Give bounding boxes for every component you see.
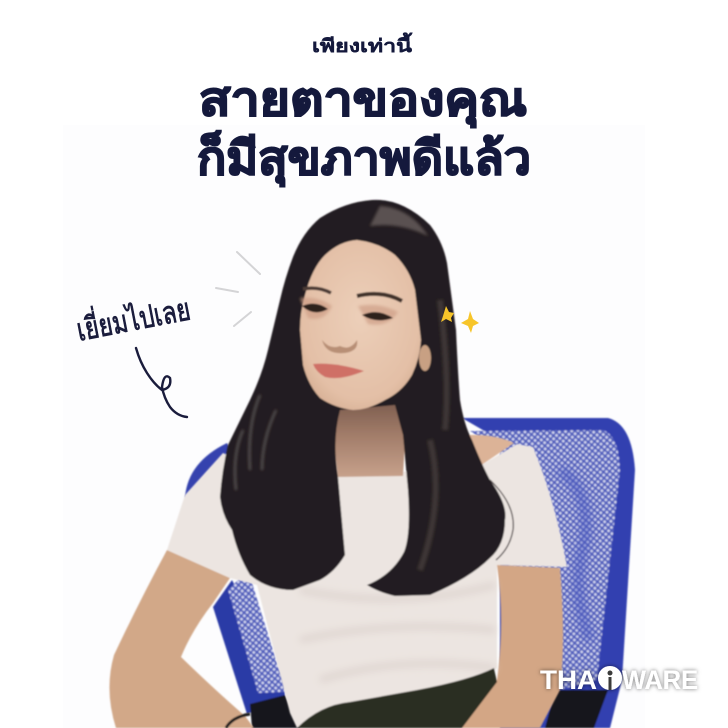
right eyebrow xyxy=(357,294,402,301)
sparkle icons xyxy=(441,306,479,333)
office chair xyxy=(185,418,635,728)
left eye xyxy=(302,304,328,312)
shoulder skin xyxy=(455,435,514,466)
chair back right xyxy=(462,418,635,728)
chair back left lower xyxy=(213,580,285,714)
sparkle large xyxy=(461,311,479,333)
neck xyxy=(328,390,408,477)
photo backdrop xyxy=(63,125,645,728)
logo icon xyxy=(598,666,622,690)
sparkle small xyxy=(441,306,454,322)
heading: intro line: เพียงเท่านี้ xyxy=(312,32,414,56)
heading: main title xyxy=(197,73,531,187)
left eyebrow xyxy=(303,288,331,293)
stray hair strands xyxy=(490,480,513,560)
logo: Thaiware xyxy=(540,665,698,695)
chair back left upper xyxy=(185,443,232,500)
left arm xyxy=(109,550,254,728)
nose xyxy=(322,340,357,353)
right arm xyxy=(462,565,563,728)
ear xyxy=(419,345,431,371)
arrow squiggle xyxy=(136,348,187,417)
wristband xyxy=(226,714,250,728)
white top xyxy=(167,444,567,728)
hair highlight xyxy=(370,206,428,236)
right eye xyxy=(362,312,393,320)
face xyxy=(300,240,421,410)
person xyxy=(109,200,567,728)
top fabric folds xyxy=(300,585,495,680)
mouth xyxy=(313,364,364,378)
logo: Thaiware: WARE xyxy=(622,665,698,695)
handwritten note: เยี่ยมไปเลย xyxy=(73,288,193,348)
heading: main title: สายตาของคุณ xyxy=(199,73,527,128)
accent lines xyxy=(216,252,260,326)
logo: Thaiware: THA xyxy=(540,665,597,695)
eye shadows xyxy=(300,298,398,325)
hair xyxy=(220,200,505,596)
skirt xyxy=(297,668,497,728)
chair seat shadow xyxy=(250,695,300,728)
heading: main title: ก็มีสุขภาพดีแล้ว xyxy=(197,130,531,187)
